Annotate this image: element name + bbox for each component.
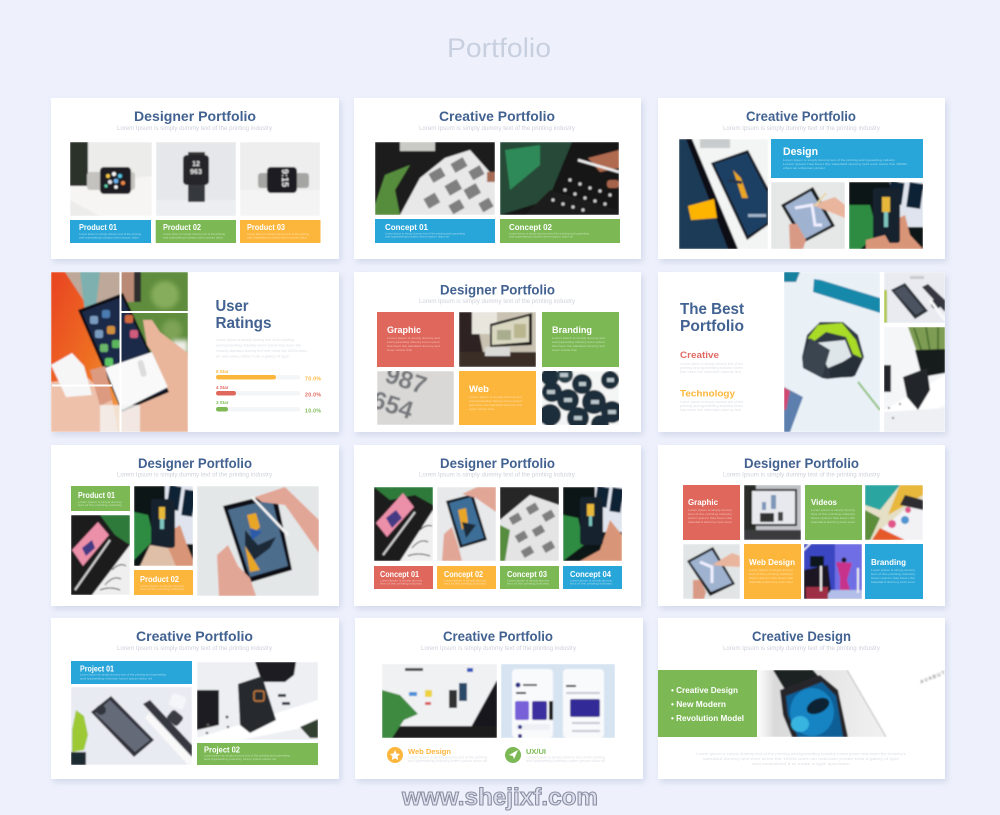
block: branding: Lorem Ipsum is simply dummy text (552, 336, 605, 340)
block: videos: lorem ipsum has been the (811, 516, 855, 520)
panel: designer portfolio concepts four (354, 445, 641, 606)
label: product 02: Product 02 (163, 223, 202, 232)
label: ux ui (526, 747, 605, 763)
heading: Designer Portfolio (138, 455, 252, 471)
block: graphic: Graphic (387, 325, 421, 335)
label: concept 04: Concept 04 (570, 570, 612, 579)
photo: watch 3: 9:15 (280, 169, 290, 187)
block: web design (744, 544, 801, 599)
block: branding: text of the printing industry (871, 572, 916, 576)
photo: pink phone (374, 487, 433, 561)
page title: Portfolio (447, 33, 551, 63)
photo: phone and airpods (51, 272, 188, 432)
block: project 01: Lorem Ipsum is simply dummy text of the printing and typesetting (80, 672, 166, 676)
label: concept 01 (374, 566, 433, 589)
block: branding: Branding (552, 325, 592, 335)
photo: black charger (884, 327, 945, 432)
block: product 01: Product 01 (78, 491, 115, 500)
panel: creative portfolio web and ux (355, 618, 643, 779)
subheading: Lorem Ipsum is simply dummy text of the printing industry (419, 126, 575, 132)
photo: sketchbook (500, 487, 559, 561)
label: ux ui: Lorem Ipsum is simply dummy text of the printing (526, 756, 605, 760)
label: concept 03: Concept 03 (507, 570, 548, 579)
heading: user ratings: User (216, 298, 248, 315)
block: branding: lorem ipsum has been the (871, 576, 915, 580)
photo: watch 3 (240, 142, 320, 216)
block: project 02: Lorem Ipsum is simply dummy text of the printing and typesetting (204, 754, 290, 758)
feature: technology: printing and typesetting industry lorem (680, 404, 743, 408)
block: project 02 (197, 743, 318, 765)
block: videos: Lorem Ipsum is simply dummy (811, 508, 856, 512)
block: project 01 (71, 661, 192, 684)
block: project 02: Project 02 (204, 746, 241, 754)
subheading: Lorem Ipsum is simply dummy text of the printing industry (723, 646, 880, 652)
block: project 02: and typesetting industry lorem ipsum dolor sit (204, 757, 276, 761)
photo: green smartwatch (784, 272, 880, 432)
block: web design: Web Design (749, 558, 795, 567)
heading: Designer Portfolio (744, 455, 859, 471)
label: concept 01: Concept 01 (380, 570, 419, 579)
heading: Designer Portfolio (134, 108, 256, 124)
text block: standard dummy text ever since the 1500s when an unknown printer took a galley of type (703, 757, 899, 761)
photo: phone case and watch (71, 687, 192, 765)
block: branding (542, 312, 619, 367)
photo: video camera set (804, 544, 862, 599)
block: product 02: text of the printing industry (140, 587, 185, 591)
subheading: Lorem Ipsum is simply dummy text of the printing industry (117, 126, 272, 132)
label: concept 01: Lorem Ipsum is simply dummy text of the printing and typesetting (385, 232, 465, 236)
block: project 01: Project 01 (80, 664, 114, 674)
block: web: has been the standard dummy text (469, 403, 522, 407)
block: product 02 (134, 570, 193, 595)
block: bullets: • Creative Design (671, 686, 738, 695)
feature: creative: printing and typesetting industry lorem (680, 366, 743, 370)
photo: pink phone (71, 515, 130, 595)
label: concept 02: Lorem Ipsum is simply dummy text of the printing and typesetting (509, 232, 589, 236)
block: branding: standard dummy text ever (871, 580, 915, 584)
feature: technology: Lorem Ipsum is simply dummy text of the (680, 400, 743, 404)
label: product 01 (70, 220, 151, 243)
panel: creative portfolio concepts (354, 98, 641, 259)
photo: monitor (744, 485, 801, 540)
text block: and scrambled it to make a type specimen (752, 762, 850, 766)
photo: watch 2: 963 (190, 169, 202, 176)
label: concept 01: Lorem Ipsum is simply dummy (380, 578, 423, 582)
photo: tablet keyboard (500, 142, 619, 215)
label: concept 02: Lorem Ipsum is simply dummy (444, 578, 487, 582)
icon: rocket badge (505, 747, 521, 763)
block: product 01: Lorem Ipsum is simply dummy (78, 500, 123, 504)
block: graphic: has been the standard dummy text (387, 344, 440, 348)
block: web (459, 371, 536, 425)
subheading: Lorem Ipsum is simply dummy text of the printing industry (117, 472, 272, 478)
block: product 02: Product 02 (140, 575, 180, 584)
label: concept 01 (375, 219, 495, 243)
photo: watch 1 (70, 142, 152, 216)
block: graphic: Graphic (688, 498, 719, 507)
photo: phone in hand (134, 486, 193, 566)
feature: creative: Creative (680, 350, 719, 360)
block: product 01 (71, 486, 130, 511)
block: videos (805, 485, 862, 540)
label: product 03 (240, 220, 320, 243)
rating: 4 star: 20.0% (305, 392, 321, 398)
block: branding: has been the standard dummy text (552, 344, 605, 348)
block: design: Lorem Ipsum is simply dummy text of the printing and typesetting industry (783, 158, 896, 162)
label: ux ui: UX/UI (526, 747, 546, 756)
text block (216, 338, 307, 358)
block: web design: lorem ipsum has been the (749, 576, 793, 580)
heading: The Best (680, 301, 744, 318)
heading: Creative Portfolio (439, 108, 555, 124)
block: graphic: text of the printing industry (688, 512, 733, 516)
feature: creative (680, 350, 743, 374)
block: graphic: lorem ipsum has been the (688, 516, 732, 520)
block: branding: and typesetting industry lorem ipsum (552, 340, 606, 344)
label: concept 02: Concept 02 (444, 570, 483, 579)
panel: designer portfolio products two (51, 445, 339, 606)
heading: Creative Portfolio (136, 628, 253, 644)
block: design: Lorem Ipsum has been the standard dummy text ever since the 1500s (783, 162, 908, 166)
label: concept 03 (500, 566, 559, 589)
block: web: ever since the (469, 407, 494, 411)
feature: technology: has been the standard dummy text (680, 408, 741, 412)
panel: designer portfolio grid eight (658, 445, 945, 606)
block: graphic: Lorem Ipsum is simply dummy (688, 508, 733, 512)
heading: user ratings: Ratings (216, 315, 272, 332)
label: product 01: and typesetting industry lorem ipsum dolor (79, 236, 139, 240)
heading: Designer Portfolio (440, 282, 555, 298)
photo: phone in hand (849, 182, 923, 249)
rating: 3 star: 10.0% (305, 408, 321, 414)
block: bullets (658, 670, 757, 737)
block: web design: standard dummy text ever (749, 580, 793, 584)
block: branding: Branding (871, 558, 906, 567)
label: product 03: and typesetting industry lorem ipsum dolor (247, 236, 307, 240)
photo: charger (197, 662, 318, 740)
label: product 02: and typesetting industry lorem ipsum dolor (163, 236, 223, 240)
rating: 4 star: 4 Star (216, 385, 229, 390)
block: branding: ever since the (552, 348, 577, 352)
block: web: Web (469, 384, 490, 394)
block: bullets: • Revolution Model (671, 714, 744, 723)
block: videos: text of the printing industry (811, 512, 856, 516)
photo: mobile app screens (501, 664, 615, 738)
label: ux ui: and typesetting industry lorem ipsum dolor sit (526, 759, 605, 763)
panel: creative portfolio projects (51, 618, 339, 779)
heading (680, 301, 744, 335)
label: product 03: Lorem Ipsum is simply dummy text of the printing (247, 232, 309, 236)
photo: phone in hand (563, 487, 622, 561)
photo: tablet illustration (437, 487, 496, 561)
text block: and typesetting industry lorem ipsum has been the (216, 344, 301, 348)
label: product 01: Lorem Ipsum is simply dummy text of the printing (79, 232, 141, 236)
text block (696, 752, 906, 766)
photo: tablet drawing (683, 544, 740, 599)
block: videos: standard dummy text ever (811, 520, 855, 524)
label: concept 02 (500, 219, 620, 243)
photo: blue face watch (761, 669, 950, 737)
icon: star badge (387, 747, 403, 763)
panel: creative design (658, 618, 950, 779)
subheading: Lorem Ipsum is simply dummy text of the printing industry (419, 472, 575, 478)
photo: blue face watch: A V A B U T L (920, 669, 950, 685)
label: concept 01: and typesetting industry lorem ipsum dolor sit (385, 234, 449, 238)
block: project 01: and typesetting industry lorem ipsum dolor sit (80, 676, 152, 680)
label: concept 01: Concept 01 (385, 223, 429, 232)
panel: designer portfolio products (51, 98, 339, 259)
photo: sketchbook (375, 142, 495, 215)
label: concept 02: text of the printing industry (444, 582, 487, 586)
label: concept 02: and typesetting industry lorem ipsum dolor sit (509, 234, 573, 238)
text block: Lorem Ipsum is simply dummy text of the printing and typesetting industry lorem ipsum has been the industry's (696, 752, 906, 756)
label: product 03: Product 03 (247, 223, 286, 232)
photo: watch 2: 12 (192, 161, 200, 168)
subheading: Lorem Ipsum is simply dummy text of the printing industry (421, 646, 576, 652)
block: design: Design (783, 146, 818, 158)
photo: colour swatches (865, 485, 923, 540)
feature: creative: has been the standard dummy text (680, 370, 741, 374)
heading: user ratings (216, 298, 272, 332)
photo: tablet illustration (197, 486, 319, 596)
photo: web design screen (382, 664, 497, 738)
block: web design: text of the printing industry (749, 572, 794, 576)
photo: tablet drawing (771, 182, 845, 249)
label: concept 04: text of the printing industry (570, 582, 613, 586)
text block: an unknown printer took a galley of type (216, 354, 289, 358)
label: concept 02 (437, 566, 496, 589)
rating: 5 star: 5 Star (216, 369, 229, 374)
label: web design (408, 747, 487, 763)
rating: 5 star: 70.0% (305, 376, 321, 382)
subheading: Lorem Ipsum is simply dummy text of the printing industry (723, 472, 880, 478)
block: design: when an unknown printer (783, 166, 825, 170)
heading: Designer Portfolio (440, 455, 555, 471)
label: product 02: Lorem Ipsum is simply dummy text of the printing (163, 232, 225, 236)
rating: 3 star (216, 400, 321, 414)
photo: badges (542, 371, 619, 425)
panel: user ratings (51, 272, 339, 432)
block: web: and typesetting industry lorem ipsum (469, 399, 523, 403)
label: product 01: Product 01 (79, 223, 118, 232)
label: concept 03: Lorem Ipsum is simply dummy (507, 578, 550, 582)
block: graphic: standard dummy text ever (688, 520, 732, 524)
photo: phone and tablet (679, 139, 768, 249)
label: concept 04 (563, 566, 622, 589)
panel: designer portfolio grid six (354, 272, 641, 433)
block: graphic: Lorem Ipsum is simply dummy text (387, 336, 440, 340)
rating: 3 star: 3 Star (216, 400, 229, 405)
subheading: Lorem Ipsum is simply dummy text of the printing industry (419, 299, 575, 305)
heading: Creative Portfolio (443, 628, 553, 644)
block: branding: Lorem Ipsum is simply dummy (871, 568, 916, 572)
text block: Lorem Ipsum is simply dummy text of the printing (216, 338, 294, 342)
block: graphic (683, 485, 740, 540)
label: web design: and typesetting industry lorem ipsum dolor sit (408, 759, 487, 763)
panel: creative portfolio design (658, 98, 945, 259)
rating: 5 star (216, 369, 321, 382)
block: graphic: and typesetting industry lorem ipsum (387, 340, 441, 344)
label: web design: Web Design (408, 747, 451, 756)
photo: numbers: 654 (368, 386, 417, 425)
block: product 01: text of the printing industry (78, 503, 123, 507)
heading: Creative Design (752, 628, 851, 644)
block: bullets: • New Modern (671, 700, 726, 709)
label: concept 04: Lorem Ipsum is simply dummy (570, 578, 613, 582)
label: concept 01: text of the printing industry (380, 582, 423, 586)
subheading: Lorem Ipsum is simply dummy text of the printing industry (117, 646, 272, 652)
photo: numbers (368, 361, 454, 425)
photo: desktop monitor (459, 312, 536, 367)
photo: numbers: 987 (382, 361, 430, 400)
label: web design: Lorem Ipsum is simply dummy text of the printing (408, 756, 487, 760)
heading: Creative Portfolio (746, 108, 856, 124)
block: product 02: Lorem Ipsum is simply dummy (140, 584, 185, 588)
text block: industry standard dummy text ever since the 1500s when (216, 349, 307, 353)
block: branding (865, 544, 923, 599)
heading: Portfolio (680, 318, 744, 335)
label: concept 03: text of the printing industry (507, 582, 550, 586)
photo: dark phone case (884, 272, 945, 323)
feature: technology (680, 388, 743, 412)
subheading: Lorem Ipsum is simply dummy text of the printing industry (723, 126, 880, 132)
label: product 02 (156, 220, 236, 243)
block: web design: Lorem Ipsum is simply dummy (749, 568, 794, 572)
watermark: www.shejixf.com (401, 784, 598, 811)
block: web: Lorem Ipsum is simply dummy text (469, 395, 522, 399)
panel: the best portfolio (658, 272, 945, 432)
feature: technology: Technology (680, 388, 735, 398)
feature: creative: Lorem Ipsum is simply dummy text of the (680, 362, 743, 366)
block: graphic (377, 312, 454, 367)
label: concept 02: Concept 02 (509, 223, 553, 232)
block: design (771, 139, 923, 178)
photo: watch 2 (156, 142, 236, 216)
rating: 4 star (216, 385, 321, 398)
block: videos: Videos (811, 498, 838, 507)
block: graphic: ever since the (387, 348, 412, 352)
